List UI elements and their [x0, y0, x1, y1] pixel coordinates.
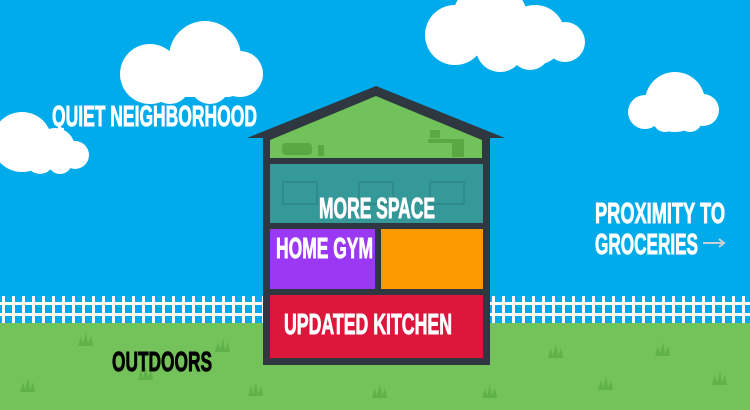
- room: more space: [270, 164, 483, 223]
- label: updated kitchen: UPDATED KITCHEN: [284, 309, 452, 341]
- attic room: [270, 96, 482, 158]
- cloud: left: [0, 112, 89, 174]
- label: home gym: HOME GYM: [276, 233, 373, 265]
- attic furniture: [282, 130, 464, 157]
- cloud: right: [628, 72, 719, 132]
- label: more space: MORE SPACE: [319, 193, 435, 225]
- cloud: top left: [120, 21, 263, 104]
- grass tufts: [20, 332, 727, 398]
- room: kitchen: [270, 295, 483, 358]
- label: quiet neighborhood: QUIET NEIGHBORHOOD: [52, 101, 257, 133]
- label: proximity to groceries: [595, 198, 725, 261]
- cloud: top center: [425, 0, 585, 72]
- grass: [0, 323, 750, 410]
- roof: [247, 86, 505, 365]
- fence: [0, 296, 750, 323]
- room: orange: [381, 229, 483, 289]
- label: outdoors: OUTDOORS: [112, 346, 212, 377]
- house: [247, 86, 505, 365]
- room: home gym: [270, 229, 375, 289]
- arrow: [703, 239, 724, 247]
